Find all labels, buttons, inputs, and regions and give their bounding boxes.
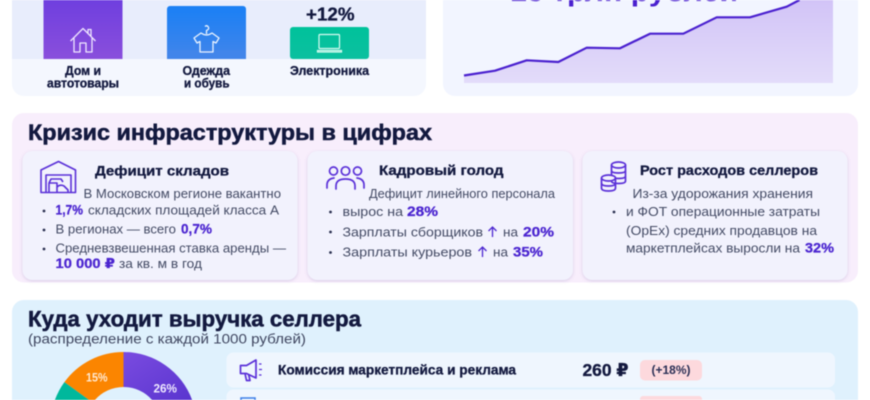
label: clothes and shoes: и обувь	[184, 76, 230, 90]
icon: house	[70, 28, 96, 52]
bullet: class A vacancy: 1,7%	[56, 202, 83, 218]
icon: laptop	[318, 34, 342, 52]
bullet: courier wages: на	[493, 244, 509, 260]
panel: infrastructure crisis	[12, 113, 858, 282]
icon: t-shirt on hanger	[194, 26, 219, 52]
card heading: Рост расходов селлеров	[640, 162, 818, 178]
bar: clothes and shoes	[167, 6, 246, 59]
label: Комиссия маркетплейса и реклама	[278, 362, 516, 378]
row: commission and ads	[226, 352, 835, 388]
donut chart	[55, 352, 192, 400]
text: line staff shortage: Дефицит линейного персонала	[369, 186, 556, 201]
icon: people	[327, 167, 364, 189]
text: opex growth: и ФОТ операционные затраты	[626, 204, 820, 219]
card heading: Кадровый голод	[379, 162, 504, 178]
bullet: grew by 28%: 28%	[407, 203, 439, 219]
value: 260 rubles: 260 ₽	[582, 360, 628, 380]
label: home and auto goods: автотовары	[47, 76, 119, 90]
card: staff shortage	[308, 151, 573, 280]
label: home and auto goods	[47, 64, 119, 90]
label: electronics: Электроника	[290, 64, 370, 78]
heading: revenue distribution: Куда уходит выручка селлера	[28, 306, 362, 332]
label: 15%: 15%	[86, 370, 108, 384]
bullet: rent rate	[43, 240, 286, 271]
card heading: Дефицит складов	[95, 162, 229, 178]
area chart	[464, 0, 833, 83]
text: opex growth: 32%	[805, 240, 835, 256]
text: opex growth: маркетплейсах выросли на	[626, 240, 801, 256]
icon: coin stacks	[602, 162, 626, 191]
bullet: rent rate: за кв. м в год	[119, 256, 202, 271]
text: Moscow vacancy: В Московском регионе вакантно	[84, 186, 281, 201]
label: home and auto goods: Дом и	[65, 64, 101, 78]
card: seller costs	[582, 151, 848, 280]
label: 26%: 26%	[154, 382, 177, 396]
panel: category growth	[12, 0, 426, 96]
icon: warehouse	[41, 162, 76, 192]
icon: megaphone	[240, 360, 262, 380]
label: clothes and shoes	[182, 64, 231, 90]
value: +12%: +12%	[306, 4, 354, 24]
bullet: picker wages	[329, 224, 555, 240]
bullet: regions vacancy: В регионах — всего	[56, 222, 176, 236]
panel: market growth chart	[443, 0, 858, 96]
badge: +18%	[640, 360, 702, 380]
bullet: picker wages: Зарплаты сборщиков	[342, 224, 483, 240]
card: warehouse shortage	[22, 151, 298, 280]
subheading: (распределение с каждой 1000 рублей)	[28, 332, 306, 346]
bullet: rent rate: 10 000 ₽	[56, 256, 115, 271]
bullet: rent rate: Средневзвешенная ставка аренды —	[56, 240, 286, 256]
bullet: grew by 28%	[329, 203, 439, 219]
panel: revenue distribution	[12, 300, 858, 400]
bullet: courier wages: Зарплаты курьеров	[342, 244, 472, 260]
label: clothes and shoes: Одежда	[182, 64, 231, 78]
bullet: picker wages: 20%	[523, 224, 555, 240]
bullet: courier wages: 35%	[513, 244, 544, 260]
text: opex growth: Из-за удорожания хранения	[632, 186, 813, 201]
text: opex growth	[613, 186, 835, 256]
text: opex growth: (OpEx) средних продавцов на	[626, 223, 818, 238]
bullet: picker wages: на	[503, 224, 519, 240]
bar: home and auto goods	[44, 0, 122, 59]
bar: electronics	[290, 27, 369, 59]
bullet: courier wages	[329, 244, 544, 260]
badge: +18%: (+18%)	[652, 365, 691, 377]
row: second cost item	[226, 390, 835, 400]
bullet: class A vacancy: складских площадей класса А	[88, 202, 279, 218]
bullet: grew by 28%: вырос на	[342, 204, 404, 219]
heading: infrastructure crisis: Кризис инфраструктуры в цифрах	[28, 120, 433, 145]
bullet: regions vacancy: 0,7%	[181, 222, 212, 236]
